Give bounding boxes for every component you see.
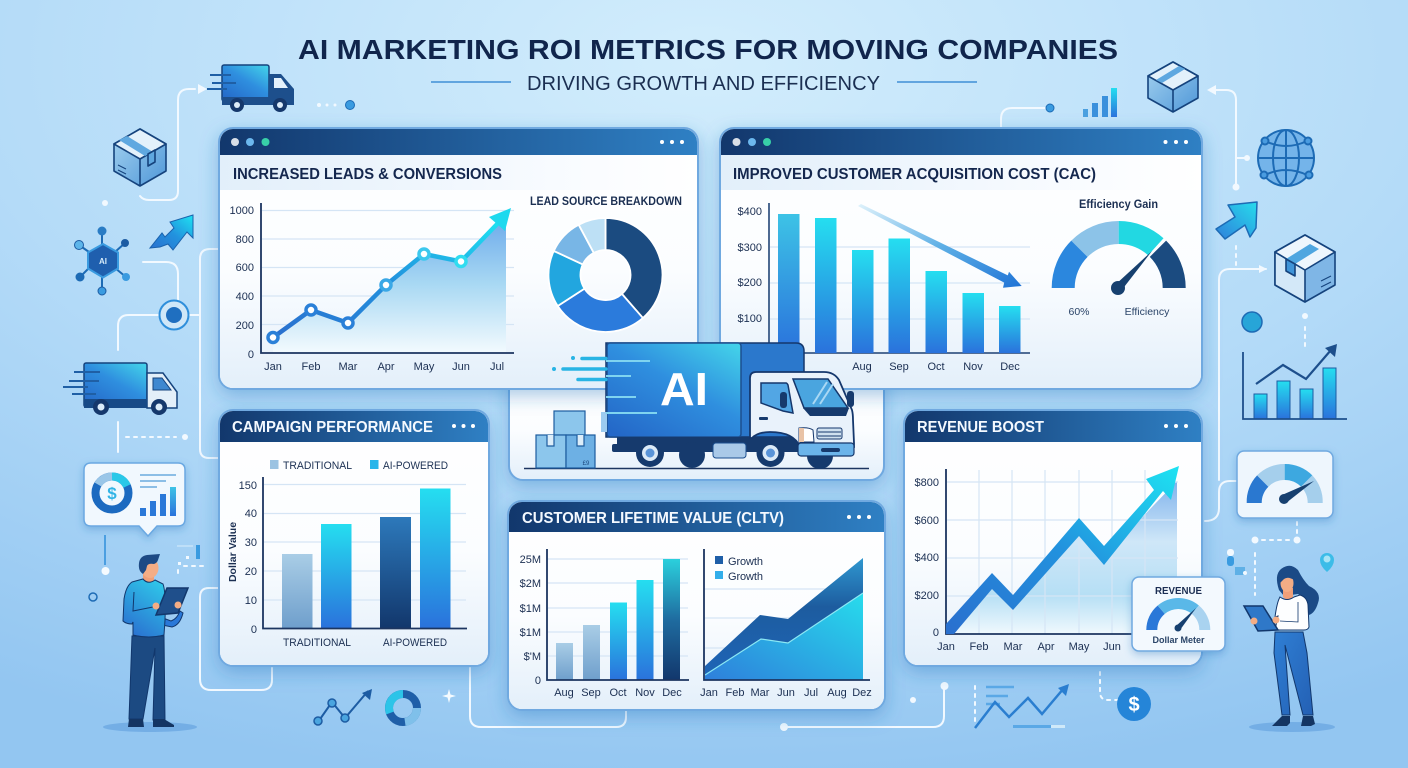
title: AI MARKETING ROI METRICS FOR MOVING COMPANIES xyxy=(298,34,1118,65)
neck xyxy=(143,574,154,586)
bar chart: campaign: TRADITIONAL xyxy=(283,637,351,649)
line chart: revenue: Jan xyxy=(937,641,955,653)
decor right small xyxy=(1227,549,1247,575)
head xyxy=(142,558,158,578)
icon: dollar coin xyxy=(1100,680,1151,721)
area chart: growth: Jan xyxy=(700,687,718,699)
icon: AI hexagon network xyxy=(74,226,130,295)
tablet xyxy=(156,588,188,615)
icon: small bars top right xyxy=(1046,88,1117,117)
heading: CUSTOMER LIFETIME VALUE (CLTV) xyxy=(522,510,784,527)
heading: INCREASED LEADS & CONVERSIONS xyxy=(233,166,502,183)
gauge: efficiency gain: Efficiency xyxy=(1125,306,1170,318)
neck xyxy=(1283,588,1293,600)
gauge: efficiency gain: 60% xyxy=(1068,306,1090,318)
person: man with tablet xyxy=(103,554,197,732)
shoes xyxy=(128,719,174,727)
bar chart: campaign: 30 xyxy=(245,537,257,549)
icon: rising arrow left xyxy=(150,215,193,250)
icon: box right xyxy=(1275,235,1335,302)
decor left small xyxy=(89,535,204,601)
bar chart: CLTV: Oct xyxy=(609,687,627,699)
card: gauge xyxy=(1237,451,1333,518)
panel: campaign performance xyxy=(219,410,489,666)
bar chart: CLTV: Sep xyxy=(581,687,601,699)
icon: speech bubble dashboard xyxy=(84,463,185,536)
line chart: leads: Jun xyxy=(452,361,470,373)
panel: customer lifetime value xyxy=(508,501,885,710)
line chart: revenue: May xyxy=(1069,641,1090,653)
icon: chart with arrow xyxy=(1243,344,1347,419)
gauge: efficiency gain: Efficiency Gain xyxy=(1079,197,1158,211)
line chart: revenue: $600 xyxy=(915,515,939,527)
line chart: leads: 0 xyxy=(248,349,254,361)
bar chart: CLTV: Dec xyxy=(662,687,682,699)
line chart: leads: Jul xyxy=(490,361,504,373)
line chart: revenue: Feb xyxy=(970,641,988,653)
icon: target node xyxy=(160,300,188,330)
bar chart: campaign xyxy=(227,477,467,649)
icon: trend lines bottom right xyxy=(975,684,1069,728)
icon: rising arrow right xyxy=(1216,202,1257,239)
bar chart: CLTV: $1M xyxy=(520,627,541,639)
right arm back xyxy=(162,611,183,627)
line chart: revenue: Apr xyxy=(1037,641,1055,653)
bar chart: CAC: $100 xyxy=(738,313,762,325)
bar chart: campaign: 0 xyxy=(251,624,257,636)
bar chart: CAC: Nov xyxy=(963,361,983,373)
bar chart: campaign: AI-POWERED xyxy=(383,637,447,649)
area chart: growth: Mar xyxy=(751,687,770,699)
heading: IMPROVED CUSTOMER ACQUISITION COST (CAC) xyxy=(733,166,1096,183)
area chart: growth: Growth xyxy=(728,556,763,568)
line chart: revenue: 0 xyxy=(933,627,939,639)
line chart: leads: 800 xyxy=(236,234,254,246)
icon: map pin xyxy=(1320,553,1334,572)
line chart: revenue: $400 xyxy=(915,552,939,564)
boxes: £9 xyxy=(583,461,590,467)
bar chart: CLTV: 0 xyxy=(535,675,541,687)
bar chart: CAC: $200 xyxy=(738,277,762,289)
icon: speech bubble dashboard: $ xyxy=(107,484,117,503)
icon: sparkle xyxy=(442,689,456,703)
area chart: growth: Jul xyxy=(804,687,818,699)
bar chart: CLTV: $2M xyxy=(520,578,541,590)
line chart: leads: May xyxy=(414,361,435,373)
legs xyxy=(129,636,165,720)
icon: box left xyxy=(114,129,166,186)
bar chart: CAC: Dec xyxy=(1000,361,1020,373)
heading: CAMPAIGN PERFORMANCE xyxy=(232,419,433,436)
bar chart: CLTV: Aug xyxy=(554,687,574,699)
panel: improved customer acquisition cost xyxy=(720,128,1202,389)
area chart: growth: Aug xyxy=(827,687,847,699)
line chart: leads: 600 xyxy=(236,262,254,274)
bar chart: CLTV: Nov xyxy=(635,687,655,699)
line chart: revenue xyxy=(915,466,1179,653)
donut chart: lead source breakdown: LEAD SOURCE BREAKDOWN xyxy=(530,194,682,208)
icon: AI hexagon network: AI xyxy=(99,257,107,266)
line chart: leads: Feb xyxy=(302,361,320,373)
legend xyxy=(270,460,448,472)
icon: delivery truck left xyxy=(63,363,177,415)
bar chart: CAC: Aug xyxy=(852,361,872,373)
speed lines xyxy=(552,356,657,413)
bar chart: campaign: 150 xyxy=(239,480,257,492)
illustration: AI truck xyxy=(524,343,869,469)
legend: TRADITIONAL xyxy=(283,460,352,472)
connector lines xyxy=(102,84,1308,731)
bar chart: CLTV xyxy=(520,549,689,699)
hair xyxy=(1277,566,1319,615)
shirt xyxy=(1275,595,1309,630)
bar chart: CAC xyxy=(738,203,1030,373)
gauge: efficiency gain xyxy=(1052,197,1186,318)
bar chart: campaign: 10 xyxy=(245,595,257,607)
donut chart: lead source breakdown xyxy=(530,194,682,332)
area chart: growth: Jun xyxy=(777,687,795,699)
icon: small donut bottom xyxy=(389,694,417,722)
icon: small line chart bottom xyxy=(314,689,372,725)
bar chart: campaign: 40 xyxy=(245,508,257,520)
line chart: revenue: Jun xyxy=(1103,641,1121,653)
panel: increased leads and conversions xyxy=(219,128,698,389)
panel: revenue boost xyxy=(904,410,1225,666)
heading: REVENUE BOOST xyxy=(917,419,1044,436)
bar chart: CAC: $300 xyxy=(738,242,762,254)
icon: box top right xyxy=(1148,62,1198,112)
area chart: growth: Feb xyxy=(726,687,744,699)
bar chart: CLTV: $'M xyxy=(524,651,541,663)
card: revenue dollar meter: REVENUE xyxy=(1155,585,1202,597)
hair xyxy=(139,554,160,574)
person: woman with tablet xyxy=(1244,566,1335,732)
shoes xyxy=(1272,716,1315,726)
line chart: revenue: $200 xyxy=(915,590,939,602)
line chart: leads: Jan xyxy=(264,361,282,373)
line chart: leads xyxy=(230,203,514,373)
sweater xyxy=(123,579,165,637)
panel: AI truck backdrop xyxy=(509,370,884,480)
card: revenue dollar meter: Dollar Meter xyxy=(1152,635,1205,645)
icon: delivery truck top xyxy=(207,65,294,112)
chassis xyxy=(617,437,800,452)
icon: dollar coin: $ xyxy=(1128,694,1140,716)
cab xyxy=(750,372,854,447)
boxes xyxy=(536,411,595,468)
face xyxy=(1280,574,1294,592)
area chart: growth: Dez xyxy=(852,687,872,699)
line chart: revenue: $800 xyxy=(915,477,939,489)
icon: globe xyxy=(1258,130,1314,186)
AI label: AI xyxy=(660,363,708,415)
icon: blue ball xyxy=(1242,312,1262,332)
area chart: growth xyxy=(700,549,872,699)
line chart: leads: Mar xyxy=(339,361,358,373)
dots trail top xyxy=(317,100,354,110)
area chart: growth: Growth xyxy=(728,571,763,583)
bar chart: campaign: 20 xyxy=(245,566,257,578)
wheels xyxy=(679,442,705,468)
legend: AI-POWERED xyxy=(383,460,448,472)
bar chart: CLTV: $1M xyxy=(520,603,541,615)
bar chart: CAC: Sep xyxy=(889,361,909,373)
pants xyxy=(1274,632,1313,715)
tablet xyxy=(1244,606,1278,631)
line chart: revenue: Mar xyxy=(1004,641,1023,653)
bar chart: campaign: Dollar Value xyxy=(227,522,239,582)
line chart: leads: 400 xyxy=(236,291,254,303)
card: revenue dollar meter xyxy=(1132,577,1225,651)
subtitle: DRIVING GROWTH AND EFFICIENCY xyxy=(527,73,880,95)
line chart: leads: 200 xyxy=(236,320,254,332)
line chart: leads: Apr xyxy=(377,361,395,373)
bar chart: CLTV: 25M xyxy=(520,554,541,566)
line chart: leads: 1000 xyxy=(230,205,254,217)
ground line xyxy=(524,468,869,470)
bar chart: CAC: $400 xyxy=(738,206,762,218)
bar chart: CAC: Oct xyxy=(927,361,945,373)
